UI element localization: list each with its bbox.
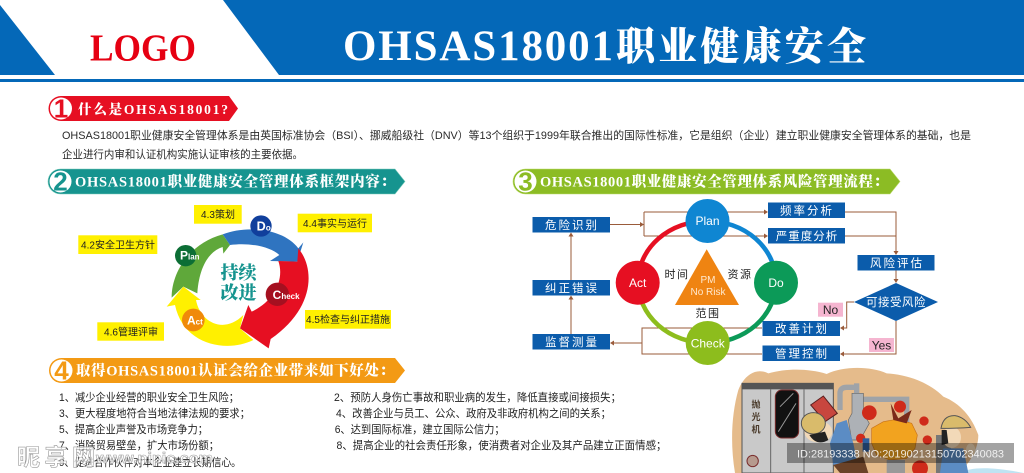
label 4.2: 4.2安全卫生方针 [81,238,155,252]
box: improvement plan: 改善计划 [775,322,829,336]
machine [742,383,833,473]
arrow: plan [172,234,230,298]
benefits list: 8、提高企业的社会责任形象，使消费者对企业及其产品建立正面情感； [336,438,666,452]
logo text: LOGO [90,28,196,70]
center text: 改进 [220,282,256,303]
arrow: check [240,248,309,348]
center text [220,262,258,303]
node: check [266,283,300,306]
box: correct errors: 纠正错误 [545,281,599,295]
tag: no [818,303,843,317]
box: frequency analysis: 频率分析 [780,204,834,218]
box: correct errors [532,280,610,296]
triangle: PM no risk: PM [700,275,716,286]
node: do: Do [257,220,271,234]
main title: 职业健康安全 [616,25,866,69]
box: severity analysis: 严重度分析 [776,229,838,243]
label 4.2 [78,235,157,254]
benefits list: 2、预防人身伤亡事故和职业病的发生，降低直接或间接损失； [334,390,621,404]
benefits list: 9、促进合作伙伴对本企业建立长期信心。 [59,455,241,469]
label 4.3: 4.3策划 [201,208,235,221]
benefits list: 5、提高企业声誉及市场竞争力； [59,422,208,436]
section 3 heading: OHSAS18001职业健康安全管理体系风险管理流程： [540,172,888,190]
watermark: site name [17,444,213,470]
benefits list: 4、改善企业与员工、公众、政府及非政府机构之间的关系； [336,406,611,420]
machine: 抛 [752,398,761,409]
box: risk assessment [858,255,934,270]
pipes [840,383,907,427]
section 4 heading: 4 [54,356,69,386]
illustration: machine explosion [732,368,1023,473]
node: check [686,321,730,365]
section 1 heading [49,94,238,124]
section 1 paragraph [62,128,971,161]
label: resources: 资源 [728,267,752,281]
arrow: do [223,229,303,262]
machine: 光 [752,411,761,422]
box: hazard identification [532,217,610,232]
tag: no: No [823,303,838,317]
label 4.6: 4.6管理评审 [104,326,158,338]
box: hazard identification: 危险识别 [545,218,599,232]
node: plan [175,245,200,266]
worker left [801,396,869,473]
benefits list: 7、消除贸易壁垒，扩大市场份额； [59,438,219,452]
section 3 heading [513,166,900,196]
decision: acceptable risk [854,283,938,321]
section 1 heading: 1 [54,94,68,124]
label 4.6 [97,322,164,341]
section 3 heading: 3 [518,166,533,196]
PDCA cycle chart [167,215,309,348]
node: plan [686,199,730,243]
label 4.5: 4.5检查与纠正措施 [306,313,390,326]
box: severity analysis [768,228,845,244]
tag: yes: Yes [872,338,891,352]
section 2 heading [48,166,405,196]
decision: acceptable risk: 可接受风险 [866,295,926,309]
node: do [250,215,272,237]
benefits list: 3、更大程度地符合当地法律法规的要求； [59,406,250,420]
risk flow connectors [568,210,898,356]
node: check: Check [691,336,726,350]
section 4 heading: 取得OHSAS18001认证会给企业带来如下好处： [76,362,394,380]
label 4.4: 4.4事实与运行 [303,217,367,230]
explosion [856,401,932,473]
node: check: Check [273,288,300,302]
worker right [936,416,975,473]
box: improvement plan [762,321,840,336]
box: risk assessment: 风险评估 [870,256,924,270]
section 1 heading: 什么是OHSAS18001? [78,101,228,118]
benefits list: 1、减少企业经营的职业安全卫生风险； [59,390,239,404]
watermark: site name: 昵享网 [17,444,95,470]
label: scope: 范围 [696,306,720,320]
benefits list: 6、达到国际标准，建立国际公信力； [335,422,505,436]
node: act [182,309,205,331]
box: frequency analysis [768,202,845,218]
label 4.5 [305,310,391,329]
section 2 heading: 2 [53,166,68,196]
PM ring diagram [616,199,798,365]
cyclone [848,393,869,440]
center text: 持续 [220,262,258,283]
section 4 heading [49,356,405,386]
node: plan: Plan [695,214,720,228]
box: monitor and measure: 监督测量 [545,335,599,349]
label 4.4 [298,214,372,232]
section 2 heading: OHSAS18001职业健康安全管理体系框架内容： [75,172,395,190]
triangle: PM no risk: No Risk [690,287,726,298]
triangle: PM no risk [675,249,739,305]
section 1 paragraph: OHSAS18001职业健康安全管理体系是由英国标准协会（BSI）、挪威船级社（DNV）等13个组织于1999年联合推出的国际性标准，它是组织（企业）建立职业健康安全管理体系的基础，也是 [62,128,971,142]
watermark: image id strip: ID:28193338 NO:20190213150702340083 [797,448,1004,460]
main title: OHSAS18001 [343,23,613,70]
header banner [0,0,1024,82]
machine: 机 [752,424,761,435]
node: do: Do [768,276,784,290]
box: management control: 管理控制 [775,346,829,360]
node: act: Act [187,314,203,328]
watermark: site name: www.nipic.com [95,450,213,467]
arrow: act [167,287,253,346]
main title [343,23,866,70]
node: do [754,261,798,305]
label 4.3 [194,205,242,224]
box: management control [762,346,840,361]
node: act [616,261,660,305]
node: act: Act [629,276,647,290]
box: monitor and measure [532,334,610,350]
label: time: 时间 [664,268,690,281]
section 1 paragraph: 企业进行内审和认证机构实施认证审核的主要依据。 [62,147,303,161]
benefits list [59,390,666,469]
watermark: image id strip [787,443,1014,463]
node: plan: Plan [180,249,200,263]
